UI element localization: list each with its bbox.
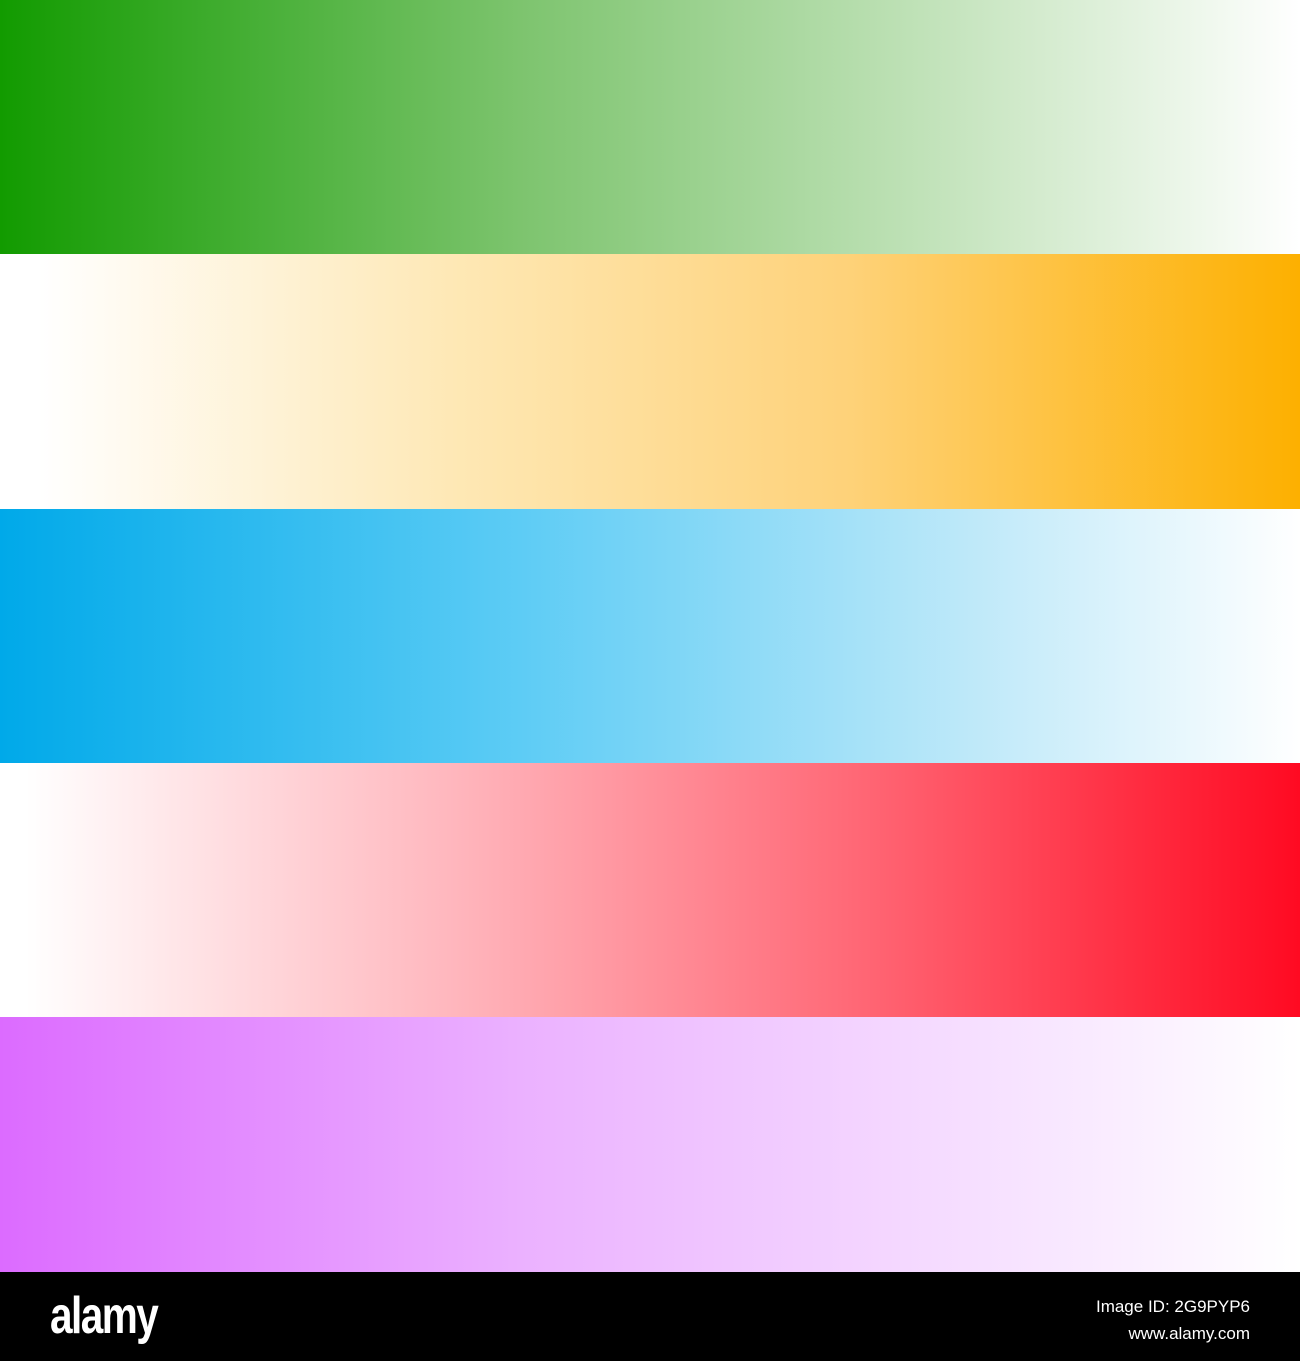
footer bar [0, 1272, 1300, 1361]
image id text: Image ID: 2G9PYP6 [1096, 1297, 1250, 1316]
image id text [1096, 1297, 1250, 1343]
band: orange gradient [0, 254, 1300, 509]
band: red gradient [0, 763, 1300, 1017]
band: green gradient [0, 0, 1300, 254]
image id text: www.alamy.com [1128, 1324, 1250, 1343]
logo text: alamy [50, 1287, 157, 1345]
band: blue gradient [0, 509, 1300, 763]
band: purple gradient [0, 1017, 1300, 1272]
